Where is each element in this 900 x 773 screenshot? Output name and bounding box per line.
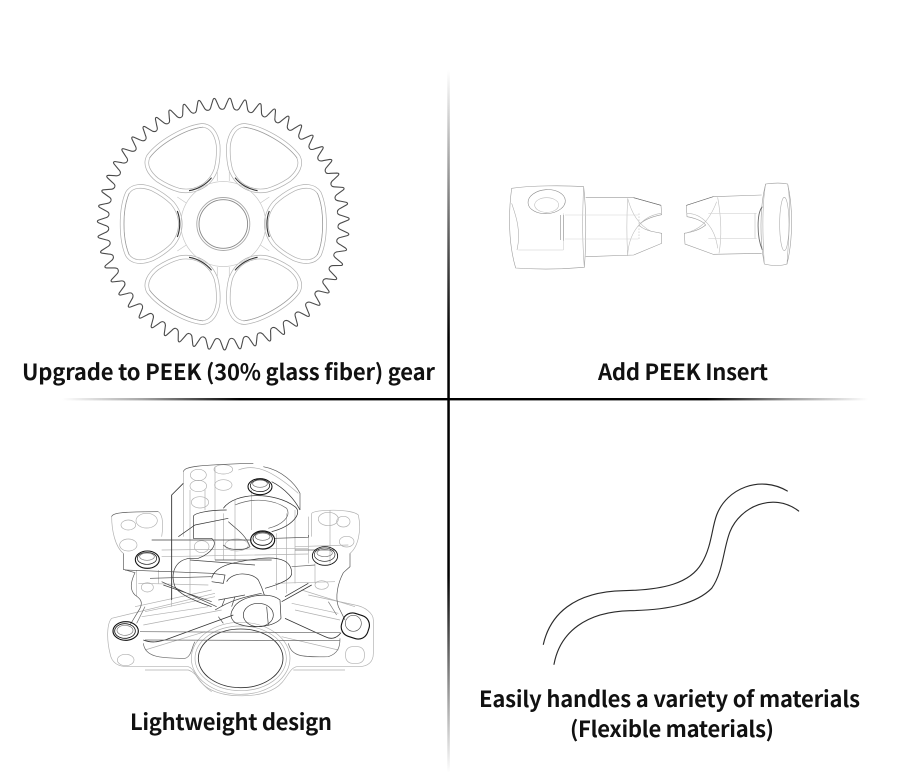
vertical divider xyxy=(447,70,450,773)
heading: gear upgrade: Upgrade to PEEK (30% glass fiber) gear xyxy=(22,355,435,387)
icon: lightweight frame xyxy=(108,463,373,696)
horizontal divider xyxy=(62,398,868,400)
heading: materials: Easily handles a variety of materials xyxy=(479,682,860,714)
insert right piece xyxy=(684,183,792,265)
icon: flexible filament strands xyxy=(543,484,799,664)
frame light outlines xyxy=(108,465,373,696)
icon: PEEK insert parts xyxy=(510,183,792,269)
subheading: flexible materials: (Flexible materials) xyxy=(570,712,774,744)
icon: PEEK gear xyxy=(92,93,354,354)
heading: PEEK insert: Add PEEK Insert xyxy=(597,355,768,387)
frame ring fittings xyxy=(113,479,372,642)
frame dark outlines xyxy=(112,463,350,688)
gear hub xyxy=(177,170,269,278)
gear teeth xyxy=(92,93,354,354)
gear windows xyxy=(122,118,325,330)
insert left piece xyxy=(510,186,662,269)
heading: lightweight design: Lightweight design xyxy=(130,705,332,737)
